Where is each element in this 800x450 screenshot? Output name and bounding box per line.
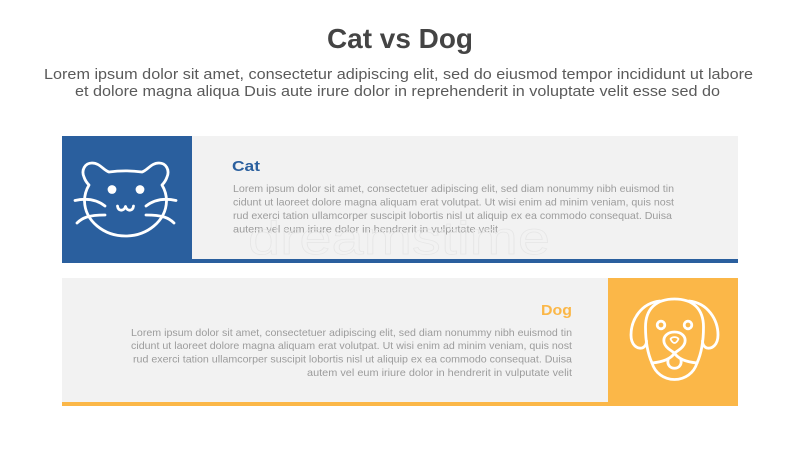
dog heading: Dog: [541, 303, 572, 319]
cat accent bar: [62, 259, 738, 263]
cat body text: autem vel eum iriure dolor in hendrerit in vulputate velit: [233, 224, 498, 236]
dog body text: cidunt ut laoreet dolore magna aliquam erat volutpat. Ut wisi enim ad minim veniam, quis nost: [131, 341, 572, 352]
cat heading: Cat: [232, 159, 260, 175]
icon: dog face: [631, 299, 718, 380]
dog body text: autem vel eum iriure dolor in hendrerit in vulputate velit: [307, 368, 572, 379]
cat body text: [233, 184, 674, 236]
cat body text: Lorem ipsum dolor sit amet, consectetuer adipiscing elit, sed diam nonummy nibh euismod tin: [233, 184, 674, 195]
dog icon tile: [608, 278, 738, 406]
cat body text: rud exerci tation ullamcorper suscipit lobortis nisl ut aliquip ex ea commodo consequat. Duisa: [233, 211, 672, 222]
dog body text: Lorem ipsum dolor sit amet, consectetuer adipiscing elit, sed diam nonummy nibh euismod tin: [131, 328, 572, 339]
panel: cat: [62, 136, 738, 263]
watermark: dreamstime: [248, 212, 550, 264]
cat body text: cidunt ut laoreet dolore magna aliquam erat volutpat. Ut wisi enim ad minim veniam, quis nost: [233, 198, 674, 208]
icon: cat face: [75, 163, 176, 236]
dog panel background: [62, 278, 738, 406]
subtitle text block: [44, 67, 753, 100]
title: Cat vs Dog: [327, 23, 473, 54]
cat panel background: [62, 136, 738, 263]
panel: dog: [62, 278, 738, 406]
cat icon tile: [62, 136, 192, 263]
dog body text: [131, 328, 572, 379]
dog body text: rud exerci tation ullamcorper suscipit lobortis nisl ut aliquip ex ea commodo consequat. Duisa: [133, 354, 572, 366]
subtitle text block: Lorem ipsum dolor sit amet, consectetur adipiscing elit, sed do eiusmod tempor incididunt ut labore: [44, 67, 753, 83]
dog accent bar: [62, 402, 738, 406]
subtitle text block: et dolore magna aliqua Duis aute irure dolor in reprehenderit in voluptate velit esse sed do: [75, 84, 720, 100]
